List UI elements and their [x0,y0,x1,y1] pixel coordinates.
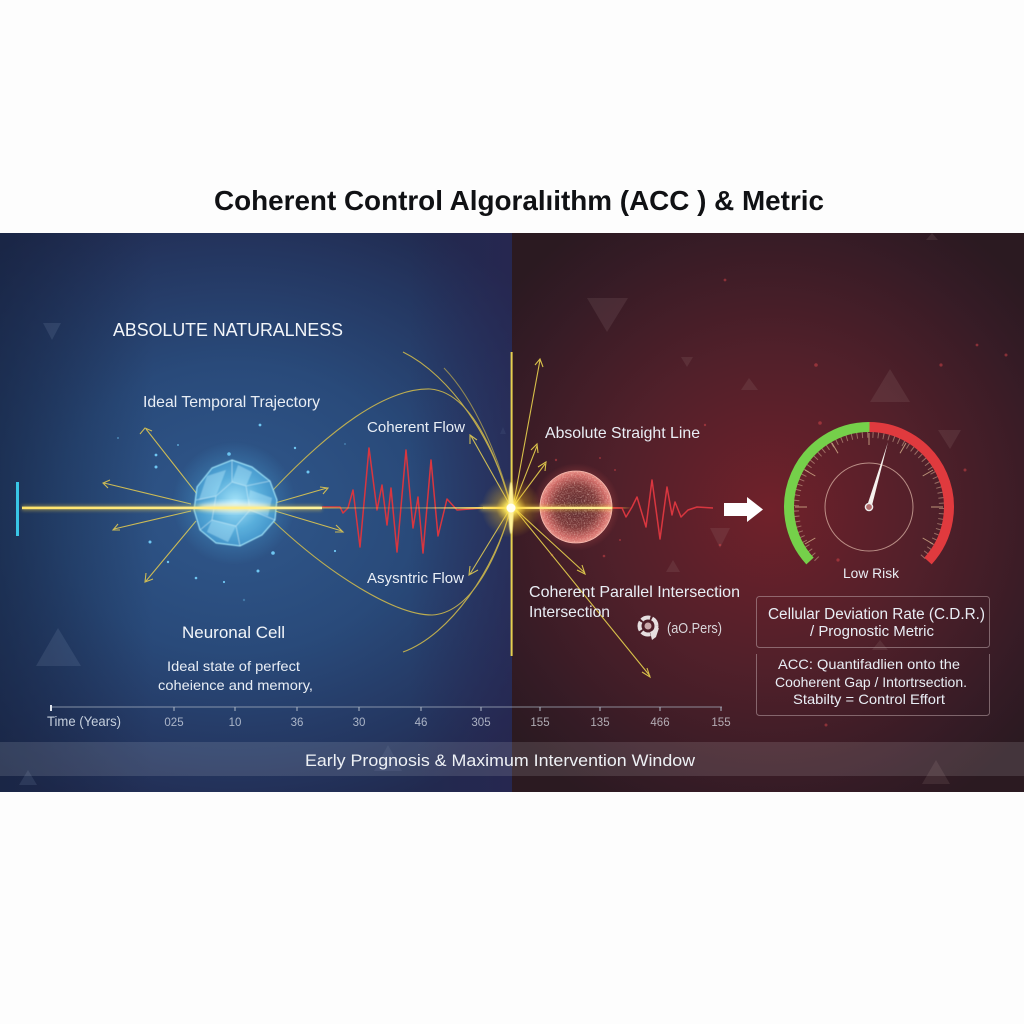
inner dial [825,463,913,551]
start marker [16,482,19,536]
text: cell description: coheience and memory, [158,677,313,693]
icon: gear badge [640,618,659,640]
text: absolute straight line: Absolute Straight Line [545,425,700,442]
radiating arrows: intersection [513,359,650,677]
text: asysntric flow: Asysntric Flow [367,571,465,587]
box: acc description: Cooherent Gap / Intortrsection. [775,674,967,690]
title: Coherent Control Algoralıithm (ACC ) & Metric [214,185,824,216]
timeline axis [47,705,731,729]
panel: metric side (red) [512,233,1024,792]
box: acc description [756,654,990,716]
axis tick labels: 155 [711,717,731,729]
green arc [789,427,870,561]
box: cellular deviation rate [756,596,990,648]
red arc [870,427,949,561]
particles: blue side [117,424,346,601]
axis tick labels: 025 [164,717,184,729]
text: cell description [158,658,313,693]
radiating arrows: neuronal cell [103,428,511,582]
axis tick labels: 46 [415,717,427,729]
particles: red side [551,279,1008,726]
box: acc description: Stabilty = Control Effort [793,691,945,707]
red oscillation: right [613,480,713,539]
golden trajectory line [22,505,632,511]
text: low risk: Low Risk [843,566,899,581]
vertical axis line [511,352,513,656]
banner text: Early Prognosis & Maximum Intervention Window [305,751,696,770]
box: cellular deviation rate: / Prognostic Metric [810,624,934,640]
text: coherent flow: Coherent Flow [367,420,466,436]
axis tick labels: 36 [291,717,303,729]
needle [867,442,888,508]
banner: intervention window [0,742,1024,776]
icon: neuronal cell sphere [172,441,296,565]
text: cell description: Ideal state of perfect [167,658,300,674]
box: cellular deviation rate: Cellular Deviation Rate (C.D.R.) [768,606,985,623]
axis title: Time (Years) [47,714,121,729]
box: acc description: ACC: Quantifadlien onto the [778,656,960,672]
red oscillation: left [322,448,482,553]
decorative faded triangles: red side [587,233,961,784]
arrow: to gauge [724,497,763,522]
major ticks [795,433,943,544]
axis tick labels: 466 [650,717,670,729]
gauge [789,427,949,561]
axis tick labels: 155 [530,717,550,729]
text: coherent parallel intersection: Intersection [529,604,610,621]
icon: damaged cell sphere [535,466,617,548]
text: neuronal cell: Neuronal Cell [182,624,285,642]
axis tick labels: 305 [471,717,491,729]
intersection flare [481,478,541,538]
axis tick labels: 10 [229,717,241,729]
panel: absolute naturalness (blue) [0,233,512,792]
hub [865,503,873,511]
axis tick labels: 135 [590,717,610,729]
curved yellow flow lines [272,352,511,652]
axis tick labels: 30 [353,717,365,729]
text: coherent parallel intersection [529,584,740,621]
minor ticks [796,435,942,559]
decorative faded triangles: blue side [19,323,506,785]
text: coherent parallel intersection: Coherent Parallel Intersection [529,584,740,601]
axis tick labels [164,717,731,729]
text: section heading: ABSOLUTE NATURALNESS [113,320,343,340]
text: ideal temporal trajectory: Ideal Temporal Trajectory [143,394,320,411]
text: badge label: (aO.Pers) [667,621,722,637]
